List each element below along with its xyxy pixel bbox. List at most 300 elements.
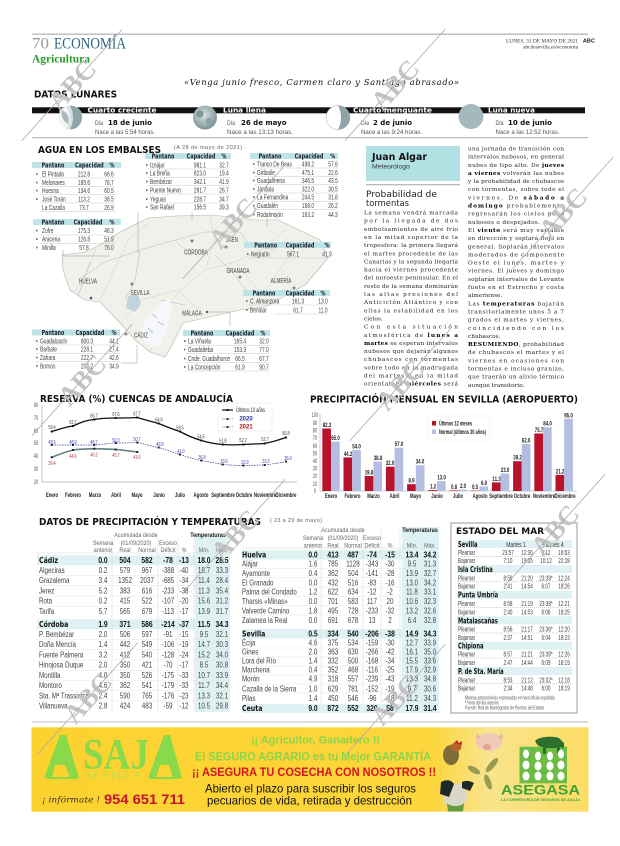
table: Cádiz and Córdoba: -40 xyxy=(179,567,189,575)
panel: estado del mar: Pleamar xyxy=(458,601,475,608)
bar values: 44.2 xyxy=(344,451,352,458)
panel: estado del mar: Bajamar xyxy=(458,686,475,693)
article heading xyxy=(366,190,437,209)
month labels: Enero xyxy=(325,493,338,500)
table: Huelva, Sevilla and Ceuta: 450 xyxy=(328,695,338,703)
table: Huelva, Sevilla and Ceuta: Acumulada desde xyxy=(321,526,365,534)
table: Málaga reservoirs: 165.4 xyxy=(234,338,247,346)
article text: left column: martes se esperan intervalos xyxy=(364,341,458,347)
table: Huelva, Sevilla and Ceuta: 33.6 xyxy=(424,658,436,666)
table: Cádiz and Córdoba: Córdoba xyxy=(39,619,69,629)
line: 2021: 45.7 xyxy=(112,452,120,459)
table: Huelva, Sevilla and Ceuta: 32.7 xyxy=(424,570,436,578)
table: Huelva, Sevilla and Ceuta: 691 xyxy=(328,617,338,625)
y axis: 80 xyxy=(34,402,38,409)
panel: estado del mar: 23:57 xyxy=(502,550,514,557)
table: Jaén reservoirs: 26.2 xyxy=(328,202,338,210)
table: Huelva reservoirs 1: • xyxy=(36,179,38,187)
table: Cádiz and Córdoba: -24 xyxy=(179,652,189,660)
month labels: Julio xyxy=(453,493,464,500)
logo: Asegasa: ASEGASA xyxy=(501,782,580,797)
table: Granada reservoirs: Pantano xyxy=(254,242,278,250)
month labels: Junio xyxy=(153,492,165,499)
table: Huelva reservoirs 2: • xyxy=(36,244,38,253)
article text: right column: a viernes volverán las nubes xyxy=(468,170,564,177)
table: Huelva, Sevilla and Ceuta: -233 xyxy=(366,608,378,616)
panel: estado del mar: 21:21 xyxy=(521,652,533,659)
site url: abcdesevilla.es/economia xyxy=(523,44,579,50)
article text: right column: RESUMIENDO, probabilidad xyxy=(468,342,564,348)
table: Jaén reservoirs xyxy=(250,153,338,219)
table: Huelva, Sevilla and Ceuta: Real xyxy=(327,542,339,550)
panel: estado del mar: 8:57 xyxy=(504,652,512,659)
bar values: 21.2 xyxy=(556,469,564,476)
table: Huelva, Sevilla and Ceuta xyxy=(242,526,439,713)
line: ultimos 10 años: 59.4 xyxy=(48,424,56,431)
line: 2021: 46.2 xyxy=(90,452,98,459)
table: Cádiz and Córdoba: 3.4 xyxy=(99,578,107,585)
table: Cádiz and Córdoba: 424 xyxy=(120,703,130,711)
table: Cádiz reservoirs: Pantano xyxy=(42,329,65,337)
table: Cádiz and Córdoba: Sta. Mª Trassierra xyxy=(39,693,89,701)
table: Cádiz and Córdoba: 526 xyxy=(142,672,152,680)
panel: estado del mar: 23:36* xyxy=(539,627,553,634)
label: luna llena xyxy=(223,107,293,136)
table: Huelva, Sevilla and Ceuta: 6.4 xyxy=(408,617,416,625)
table: Huelva, Sevilla and Ceuta: -141 xyxy=(366,570,378,578)
table: Almería reservoirs: • xyxy=(246,297,248,306)
table: Córdoba reservoirs: 26.7 xyxy=(219,186,229,195)
table: Huelva, Sevilla and Ceuta: -239 xyxy=(366,676,378,684)
table: Huelva reservoirs 1: Huesna xyxy=(42,187,59,195)
table: Cádiz and Córdoba: -685 xyxy=(162,578,174,585)
table: Málaga reservoirs: 90.7 xyxy=(259,363,269,372)
bar values: 1.2 xyxy=(430,484,436,491)
y axis: 90 xyxy=(313,420,317,427)
line: 2020: 41.0 xyxy=(177,448,185,455)
table: Málaga reservoirs: • xyxy=(184,346,186,354)
table: Huelva reservoirs 1: 78.7 xyxy=(104,179,114,187)
table: Cádiz reservoirs: % xyxy=(112,329,117,337)
table: Cádiz and Córdoba: % xyxy=(182,546,187,554)
line: ultimos 10 años: 62.7 xyxy=(69,419,77,426)
table: Huelva, Sevilla and Ceuta: 1.4 xyxy=(309,658,317,666)
legend xyxy=(218,403,272,431)
table: Cádiz and Córdoba: 32.1 xyxy=(216,693,228,701)
bar values: 75.7 xyxy=(535,427,543,434)
table: Jaén reservoirs: • xyxy=(253,211,255,219)
table: Cádiz reservoirs: • xyxy=(36,362,38,371)
table: Córdoba reservoirs: La Breña xyxy=(150,170,170,178)
logo: ASAJA Sevilla: SAJ xyxy=(83,731,149,778)
table: Huelva, Sevilla and Ceuta: 487 xyxy=(347,550,359,560)
table: Granada reservoirs: Negratín xyxy=(251,250,270,259)
table: Cádiz and Córdoba: 579 xyxy=(120,567,130,575)
article text: right column: tormentas e incluso granizo, xyxy=(468,366,564,372)
table: Almería reservoirs: Beninar xyxy=(250,306,267,315)
panel: estado del mar: 3:12 xyxy=(542,550,551,557)
panel: estado del mar: 8:58 xyxy=(504,601,512,608)
table: Málaga reservoirs: La Concepción xyxy=(188,363,221,372)
table: Huelva, Sevilla and Ceuta: 4.9 xyxy=(309,676,317,684)
table: Jaén reservoirs: 163.2 xyxy=(302,211,315,219)
y axis: 30 xyxy=(313,466,317,473)
panel: estado del mar: 2:40 xyxy=(504,610,513,617)
legend: Normal (últimos 30 años) xyxy=(439,430,486,436)
table: Huelva, Sevilla and Ceuta: -74 xyxy=(367,550,378,560)
table: Cádiz reservoirs: 27.4 xyxy=(109,346,119,354)
y axis: 20 xyxy=(313,473,317,481)
line: 2020: 32.9 xyxy=(241,459,249,466)
table: Huelva, Sevilla and Ceuta: -32 xyxy=(385,608,395,616)
table: Cádiz and Córdoba: 5.7 xyxy=(99,608,107,616)
bars: ultimos 12 meses xyxy=(322,428,564,491)
table: Cádiz and Córdoba: 30.3 xyxy=(216,642,228,649)
y axis xyxy=(312,412,577,495)
table: Córdoba reservoirs: Yeguas xyxy=(150,195,166,204)
label: luna nueva: Nace a las 12:52 horas. xyxy=(496,129,560,136)
month labels: Noviembre xyxy=(254,492,276,499)
table: Cádiz and Córdoba: anterior xyxy=(94,546,112,554)
y axis: 70 xyxy=(34,415,38,422)
bar values: 13.0 xyxy=(437,475,446,482)
table: Huelva reservoirs 2: Minilla xyxy=(42,244,56,253)
table: Huelva, Sevilla and Ceuta: Morón xyxy=(242,676,260,684)
legend: Últimos 12 meses xyxy=(439,420,472,428)
table: Huelva, Sevilla and Ceuta: -25 xyxy=(385,667,395,675)
table: Huelva, Sevilla and Ceuta: Máx. xyxy=(424,542,436,550)
table: Huelva, Sevilla and Ceuta: 701 xyxy=(328,598,338,606)
article heading: tormentas xyxy=(366,199,409,209)
panel: estado del mar: 6:07 xyxy=(542,584,551,591)
table: Huelva, Sevilla and Ceuta: 728 xyxy=(348,608,358,616)
table: Cádiz and Córdoba: 18.7 xyxy=(198,567,210,575)
article text: left column: Con esta situación xyxy=(364,324,458,331)
table: Huelva, Sevilla and Ceuta: 0.0 xyxy=(309,617,317,625)
table: Cádiz and Córdoba: 29.8 xyxy=(216,703,228,711)
heading: DATOS LUNARES xyxy=(34,89,117,100)
table: Huelva reservoirs 1: • xyxy=(36,170,38,179)
table: Almería reservoirs: C. Almanzora xyxy=(250,297,280,306)
panel: estado del mar: P. de Sta. María xyxy=(458,667,504,676)
table: Jaén reservoirs: 43.5 xyxy=(328,177,338,185)
article text: right column: nubes de tipo alto. De jueves xyxy=(468,163,565,169)
table: Málaga reservoirs: 153.3 xyxy=(234,346,247,354)
table: Huelva, Sevilla and Ceuta: 363 xyxy=(328,649,338,657)
table: Cádiz and Córdoba: -78 xyxy=(163,555,173,565)
panel: estado del mar: Bajamar xyxy=(458,610,475,617)
panel: estado del mar: 6:09 xyxy=(542,660,551,667)
panel: estado del mar: 21:12 xyxy=(521,678,533,685)
table: Huelva, Sevilla and Ceuta: Palma del Condado xyxy=(242,589,297,597)
table: Cádiz and Córdoba: -59 xyxy=(163,703,173,711)
table: Huelva reservoirs 2: 48.3 xyxy=(104,227,114,236)
date note: (A 28 de mayo de 2021) xyxy=(174,145,242,151)
table: Huelva, Sevilla and Ceuta: -19 xyxy=(385,686,395,694)
table: Córdoba reservoirs: San Rafael xyxy=(150,203,174,212)
city labels: ALMERÍA xyxy=(271,277,291,285)
table: Huelva reservoirs 1: • xyxy=(36,187,38,195)
panel: estado del mar: 19:05 xyxy=(521,558,533,565)
table: Cádiz and Córdoba: 421 xyxy=(142,662,152,670)
table: Cádiz and Córdoba: 582 xyxy=(141,555,153,565)
panel: estado del mar: Pleamar xyxy=(458,576,475,583)
table: Cádiz and Córdoba: 590 xyxy=(120,693,130,701)
table: Cádiz and Córdoba: 34.0 xyxy=(216,652,228,660)
table: Cádiz and Córdoba: -214 xyxy=(161,619,175,629)
article text: right column: almeriense. xyxy=(468,293,502,299)
table: Huelva, Sevilla and Ceuta: 0.0 xyxy=(308,550,318,560)
table: Huelva reservoirs 1: 212.8 xyxy=(78,170,91,179)
panel: estado del mar: 23:39* xyxy=(539,576,553,583)
table: Huelva, Sevilla and Ceuta: 352 xyxy=(328,667,338,675)
label: luna llena: Día xyxy=(227,120,235,127)
line: 2021 xyxy=(48,448,141,467)
table: Cádiz and Córdoba: Mín. xyxy=(199,546,210,554)
label: luna nueva: Día xyxy=(496,120,504,127)
table: Huelva, Sevilla and Ceuta: 34.2 xyxy=(424,580,436,588)
logo: ASAJA Sevilla: SEVILLA xyxy=(85,770,142,781)
table: Huelva, Sevilla and Ceuta: 1128 xyxy=(346,561,360,569)
table: Huelva, Sevilla and Ceuta: 0.4 xyxy=(309,667,317,675)
table: Huelva, Sevilla and Ceuta: 9.5 xyxy=(408,561,416,569)
panel: estado del mar: 6:04 xyxy=(542,635,551,642)
table: Huelva reservoirs 2: Capacidad xyxy=(74,219,102,227)
article text: right column: general. Soplarán intervalos xyxy=(468,243,564,250)
table: Córdoba reservoirs: Capacidad xyxy=(187,153,215,161)
article text: right column: transitoriamente unos 5 a 7 xyxy=(468,310,564,316)
table: Huelva, Sevilla and Ceuta: 320 xyxy=(366,703,378,713)
line: 2020: 33.6 xyxy=(220,458,228,465)
table: Cádiz and Córdoba: Acumulada desde xyxy=(114,531,158,539)
table: Cádiz and Córdoba: -34 xyxy=(179,578,189,585)
table: Huelva, Sevilla and Ceuta: 9.0 xyxy=(308,703,318,713)
table: Jaén reservoirs: • xyxy=(253,161,255,169)
table: Huelva reservoirs 2: 57.8 xyxy=(79,244,89,253)
table: Cádiz reservoirs xyxy=(32,329,120,371)
line: ultimos 10 años: 56.8 xyxy=(282,430,290,437)
table: Córdoba reservoirs: 41.9 xyxy=(219,178,229,186)
table: Córdoba reservoirs: • xyxy=(146,186,148,195)
table: Málaga reservoirs: 66.5 xyxy=(235,355,245,363)
table: Cádiz and Córdoba: 4.0 xyxy=(99,672,107,680)
line: ultimos 10 años: 52.2 xyxy=(239,437,247,444)
ad copy: pecuarios de vida, retirada y destrucción xyxy=(207,793,412,807)
table: Huelva reservoirs 1 xyxy=(32,162,121,212)
table: Málaga reservoirs: Pantano xyxy=(191,330,214,338)
bar values: 8.9 xyxy=(408,478,415,485)
table: Cádiz and Córdoba: 2037 xyxy=(140,578,154,585)
table: Almería reservoirs: Pantano xyxy=(253,290,276,298)
month labels: Abril xyxy=(390,493,400,500)
table: Huelva, Sevilla and Ceuta: 34.3 xyxy=(423,629,437,639)
table: Huelva, Sevilla and Ceuta: 516 xyxy=(348,580,358,588)
table: Cádiz and Córdoba: Normal xyxy=(138,546,156,554)
table: Almería reservoirs: % xyxy=(321,290,326,298)
table: Jaén reservoirs: % xyxy=(330,153,336,161)
table: Huelva, Sevilla and Ceuta: 432 xyxy=(328,580,338,588)
table: Córdoba reservoirs: 981.1 xyxy=(194,161,207,170)
legend: 2020 xyxy=(239,416,253,422)
table: Huelva, Sevilla and Ceuta: Mín. xyxy=(407,542,418,550)
table: Huelva, Sevilla and Ceuta: Ceuta xyxy=(242,703,263,713)
city labels: HUELVA xyxy=(79,279,97,286)
label: cuarto creciente: Cuarto creciente xyxy=(88,107,157,115)
line: 2020: 50.7 xyxy=(133,436,141,443)
table: Huelva, Sevilla and Ceuta: 11.2 xyxy=(406,695,418,703)
article text: left column: embolsamientos de aire frío xyxy=(364,226,458,233)
line: 2020: 46.8 xyxy=(156,441,164,448)
proverb quote: «Venga junio fresco, Carmen claro y Santiago abrasado» xyxy=(184,77,459,87)
author box: Juan Algar xyxy=(371,152,427,163)
panel: estado del mar: 2:47 xyxy=(504,660,512,667)
logo: Asegasa: LA CORREDURÍA DE SEGUROS DE ASAJA xyxy=(501,797,580,802)
label: cuarto menguante: Nace a las 9:24 horas. xyxy=(361,129,422,136)
table: Cádiz reservoirs: 34.9 xyxy=(109,362,119,371)
logo: Asegasa xyxy=(501,737,580,802)
table: Huelva, Sevilla and Ceuta: 2.0 xyxy=(309,649,317,657)
table: Huelva, Sevilla and Ceuta: 2 xyxy=(388,617,392,625)
table: Jaén reservoirs: Rodalmojón xyxy=(257,211,283,219)
table: Cádiz and Córdoba: 442 xyxy=(120,642,130,649)
label: luna nueva xyxy=(488,107,560,136)
table: Jaén reservoirs: Guadalén xyxy=(257,202,279,210)
panel: estado del mar: Sevilla xyxy=(458,540,477,549)
table: Cádiz and Córdoba: 350 xyxy=(120,672,130,680)
panel: estado del mar: 16:03 xyxy=(558,550,570,557)
table: Huelva, Sevilla and Ceuta: 117 xyxy=(367,598,377,606)
label: cuarto creciente: 18 de junio xyxy=(108,119,152,127)
table: Huelva, Sevilla and Ceuta: 332 xyxy=(328,658,338,666)
moon: cuarto menguante xyxy=(326,106,350,130)
watermarks: ABC: ABC xyxy=(533,182,593,244)
table: Jaén reservoirs: Pantano xyxy=(259,153,282,161)
table: Huelva reservoirs 1: • xyxy=(36,195,38,204)
table: Cádiz reservoirs: • xyxy=(36,337,38,346)
table: Cádiz reservoirs: 42.6 xyxy=(109,354,119,362)
month labels: Febrero xyxy=(344,493,361,500)
table: Jaén reservoirs: 31.8 xyxy=(328,194,338,202)
table: Almería reservoirs xyxy=(243,290,330,315)
panel: estado del mar: 14:53 xyxy=(521,610,533,617)
panel: estado del mar: Viernes 4 xyxy=(542,541,564,549)
table: Almería reservoirs: 161.3 xyxy=(292,297,305,306)
table: Huelva, Sevilla and Ceuta: 1.0 xyxy=(309,686,317,694)
table: Jaén reservoirs: • xyxy=(253,169,255,177)
table: Huelva, Sevilla and Ceuta: 629 xyxy=(328,686,338,694)
table: Huelva, Sevilla and Ceuta: 622 xyxy=(328,589,338,597)
table: Huelva, Sevilla and Ceuta: 33.9 xyxy=(424,640,436,648)
panel: estado del mar: 6:06 xyxy=(542,610,551,617)
watermarks: ABC: ABC xyxy=(365,669,425,731)
table: Huelva, Sevilla and Ceuta: 546 xyxy=(348,695,358,703)
panel: estado del mar: Punta Umbría xyxy=(458,591,498,600)
table: Huelva reservoirs 2: % xyxy=(110,219,115,227)
table: Huelva reservoirs 1: 26.9 xyxy=(104,204,114,212)
table: Córdoba reservoirs: 156.5 xyxy=(194,203,207,212)
table: Granada reservoirs: 567.1 xyxy=(287,250,300,259)
table: Cádiz and Córdoba: 0.0 xyxy=(98,555,108,565)
label: cuarto menguante: 2 de junio xyxy=(373,119,412,127)
panel: estado del mar: 2:34 xyxy=(504,686,513,693)
table: Huelva, Sevilla and Ceuta: Valverde Camino xyxy=(242,608,289,616)
table: Cádiz and Córdoba: 34.4 xyxy=(216,683,228,690)
table: Huelva, Sevilla and Ceuta: -43 xyxy=(385,676,395,684)
bar values: 62.0 xyxy=(522,438,530,445)
month labels: Septiembre xyxy=(489,493,513,500)
table: Huelva, Sevilla and Ceuta: Déficit xyxy=(364,542,380,550)
table: Huelva, Sevilla and Ceuta: -266 xyxy=(366,649,378,657)
panel: precipitation and temperature tables xyxy=(37,516,439,713)
watermarks: ABC: ABC xyxy=(205,504,265,566)
table: Cádiz and Córdoba: 2.0 xyxy=(99,631,107,639)
table: Huelva, Sevilla and Ceuta: 11.8 xyxy=(406,589,418,597)
panel: estado del mar: 14:51 xyxy=(521,635,533,642)
table: Huelva, Sevilla and Ceuta: Semana xyxy=(303,534,324,542)
table: Cádiz and Córdoba: 28.4 xyxy=(216,578,228,585)
table: Málaga reservoirs: • xyxy=(184,355,186,363)
table: Huelva, Sevilla and Ceuta: Marchena xyxy=(242,667,270,675)
panel: estado del mar: Isla Cristina xyxy=(458,565,493,574)
bar values: 95.0 xyxy=(564,413,573,420)
table: Huelva, Sevilla and Ceuta: 34.2 xyxy=(423,550,437,560)
icon: hen xyxy=(443,740,462,765)
panel: estado del mar: 23:32* xyxy=(539,678,553,685)
table: Cádiz and Córdoba: -233 xyxy=(162,588,174,596)
label: luna nueva: 10 de junio xyxy=(508,119,552,127)
table: Jaén reservoirs: Tranco De Beas xyxy=(257,161,292,169)
date and site: LUNES, 31 DE MAYO DE 2021 xyxy=(506,39,578,45)
bar values: 0.8 xyxy=(451,484,457,491)
table: Jaén reservoirs: • xyxy=(253,202,255,210)
article text: left column: en la mitad superior de la xyxy=(364,235,459,241)
line: ultimos 10 años xyxy=(48,411,290,446)
table: Málaga reservoirs: Cnde. Guadalhorce xyxy=(188,355,231,363)
month labels: Diciembre xyxy=(555,493,575,500)
table: Huelva reservoirs 2: Pantano xyxy=(42,219,65,227)
watermarks: ABC: ABC xyxy=(203,192,263,254)
footnotes: Fuente: Red de Mareógrafos de Puertos del Estado. xyxy=(465,705,545,711)
table: Huelva, Sevilla and Ceuta: 583 xyxy=(348,598,358,606)
table: Cádiz and Córdoba: -20 xyxy=(179,598,189,606)
table: Málaga reservoirs: • xyxy=(184,363,186,372)
table: Córdoba reservoirs: 34.7 xyxy=(219,195,229,204)
table: Huelva, Sevilla and Ceuta: -152 xyxy=(366,686,378,694)
panel: estado del mar: 2:41 xyxy=(504,584,512,591)
table: Córdoba reservoirs: 342.1 xyxy=(194,178,207,186)
table: Huelva, Sevilla and Ceuta: -15 xyxy=(385,550,396,560)
table: Huelva, Sevilla and Ceuta: 334 xyxy=(327,629,339,639)
table: Huelva, Sevilla and Ceuta: 30.6 xyxy=(424,686,436,694)
article text: right column: domingo probablemente xyxy=(468,204,565,210)
article text: right column: regresarán los cielos poco xyxy=(468,211,564,218)
footnotes: * Hora del día anterior xyxy=(465,700,499,706)
table: Almería reservoirs: 13.0 xyxy=(318,297,328,306)
line: ultimos 10 años: 64.9 xyxy=(155,417,163,424)
table: Cádiz reservoirs: Barbate xyxy=(40,346,57,354)
line: 2020 xyxy=(48,436,292,466)
table: Cádiz and Córdoba: Doña Mencía xyxy=(39,642,76,649)
table: Huelva, Sevilla and Ceuta: Sevilla xyxy=(242,629,266,639)
bar values: 19.8 xyxy=(365,470,373,477)
table: Jaén reservoirs: Guadalmena xyxy=(257,177,285,185)
table: Cádiz and Córdoba: -19 xyxy=(179,642,189,649)
table: Huelva, Sevilla and Ceuta: 9.7 xyxy=(408,686,416,694)
table: Jaén reservoirs: 168.0 xyxy=(302,202,315,210)
article text: right column: fuete en el Estrecho y costa xyxy=(468,285,565,291)
section title: ECONOMÍA xyxy=(54,34,126,52)
table: Cádiz reservoirs: 800.3 xyxy=(81,337,94,346)
